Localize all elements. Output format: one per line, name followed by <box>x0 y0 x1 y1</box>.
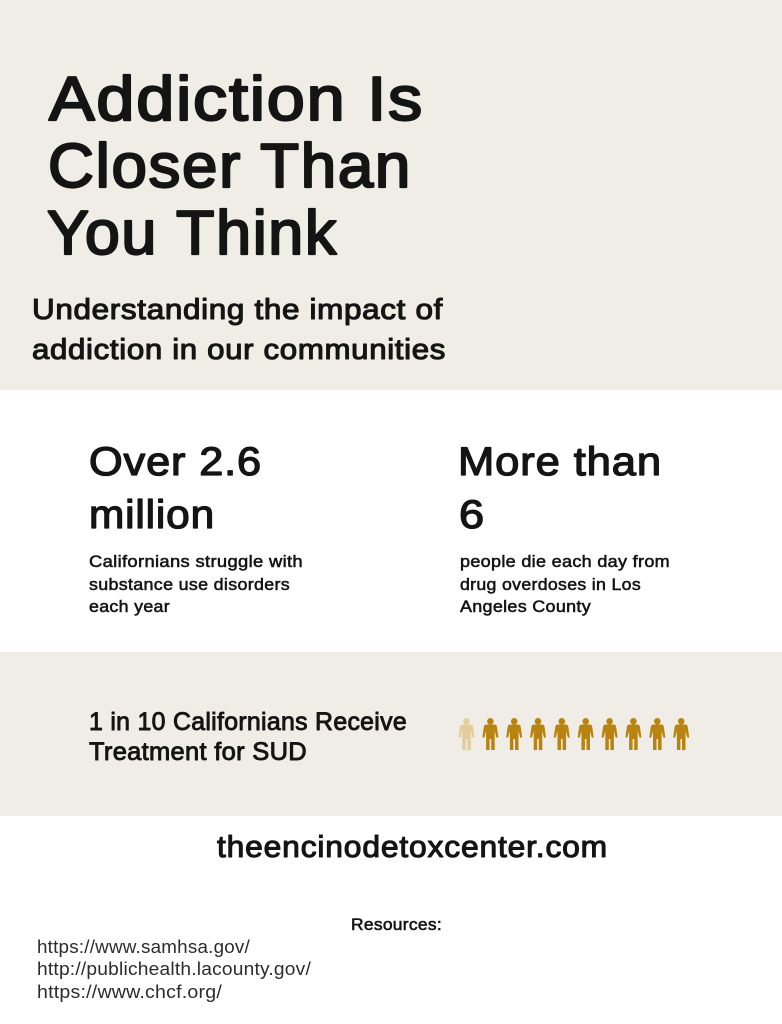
stat number: more than 6 <box>458 440 662 537</box>
resources list: https://www.chcf.org/ <box>37 982 222 1002</box>
resources list <box>37 937 311 1002</box>
subtitle <box>32 294 446 366</box>
resources heading: Resources: <box>351 915 442 934</box>
stat description: Californians: Californians struggle with <box>89 552 303 571</box>
stat: Californians <box>89 440 303 616</box>
icon: person 3 <box>506 718 522 750</box>
icon: person 6 <box>578 718 594 750</box>
treatment heading <box>89 708 407 766</box>
title: Closer Than <box>48 132 412 201</box>
treatment heading: 1 in 10 Californians Receive <box>89 708 407 736</box>
icon: person 7 <box>602 718 618 750</box>
subtitle: Understanding the impact of <box>32 294 443 326</box>
icon: person 4 <box>530 718 546 750</box>
panel: header <box>0 0 782 390</box>
stat number: more than 6: 6 <box>459 493 485 537</box>
stat description: overdoses <box>460 552 670 616</box>
stat description: overdoses: people die each day from <box>460 552 670 571</box>
icon: person 5 <box>554 718 570 750</box>
stat description: Californians: substance use disorders <box>89 575 290 594</box>
icon: person 10 <box>673 718 689 750</box>
stat: Los Angeles County <box>458 440 670 616</box>
icon: person 9 <box>649 718 665 750</box>
stat number: over 2.6 million: million <box>89 493 215 537</box>
icon: person 2 <box>482 718 498 750</box>
panel: statistics <box>89 440 670 616</box>
stat number: over 2.6 million <box>89 440 262 537</box>
stat description: overdoses: Angeles County <box>460 597 591 616</box>
resources list: http://publichealth.lacounty.gov/ <box>37 959 311 979</box>
subtitle: addiction in our communities <box>32 334 446 366</box>
resources list: https://www.samhsa.gov/ <box>37 937 250 957</box>
treatment heading: Treatment for SUD <box>89 738 307 766</box>
stat description: Californians: each year <box>89 597 170 616</box>
panel: treatment <box>0 652 782 816</box>
website: theencinodetoxcenter.com <box>217 829 608 864</box>
stat description: overdoses: drug overdoses in Los <box>460 575 641 594</box>
icon: treated person <box>459 718 474 750</box>
title: You Think <box>47 199 338 268</box>
icon: person 8 <box>625 718 641 750</box>
title <box>47 65 424 268</box>
stat number: over 2.6 million: Over 2.6 <box>89 440 262 484</box>
stat number: more than 6: More than <box>458 440 662 484</box>
title: Addiction Is <box>49 65 424 134</box>
stat description: Californians <box>89 552 303 616</box>
pictogram: 1 of 10 people <box>459 718 689 750</box>
